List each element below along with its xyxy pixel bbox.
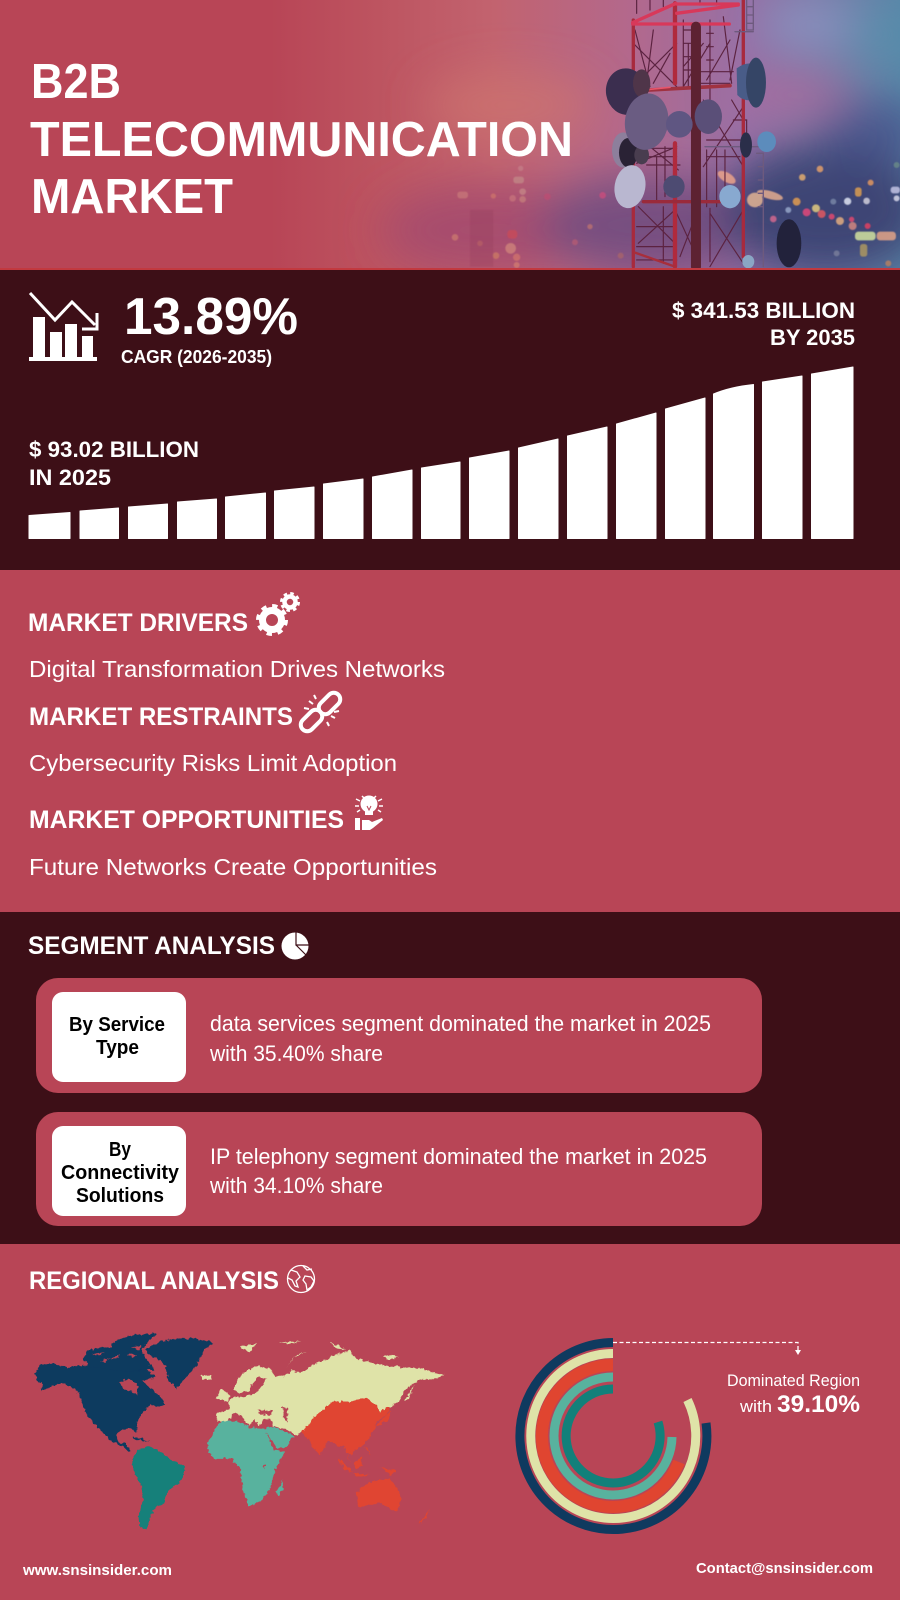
bar chart: growth 2025 to 2035: [29, 367, 853, 538]
radial bar chart: [520, 1342, 707, 1529]
label: 2035 value: $ 341.53 BILLION: [672, 298, 855, 323]
label: 2035 value: [672, 298, 855, 350]
heading: market restraints: MARKET RESTRAINTS: [29, 703, 293, 731]
arrow: dotted leader line: [613, 1342, 801, 1355]
icon: broken chain: [298, 690, 343, 734]
callout: dominated region: [727, 1372, 860, 1418]
card: connectivity solutions: Solutions: [76, 1185, 164, 1207]
callout: dominated region: 39.10%: [777, 1391, 860, 1418]
card: service type: data services segment dominated the market in 2025: [210, 1011, 711, 1036]
title: MARKET: [31, 170, 233, 224]
text: driver: Digital Transformation Drives Networks: [29, 656, 445, 682]
panel: market dynamics: [0, 570, 900, 912]
CAGR label: CAGR (2026-2035): [121, 346, 272, 367]
telecom tower: [633, 0, 763, 267]
icon: declining chart: [29, 293, 97, 361]
text: restraint: Cybersecurity Risks Limit Adoption: [29, 750, 397, 776]
icon: pie chart: [282, 932, 310, 960]
callout: dominated region: with: [739, 1397, 772, 1416]
heading: market drivers: MARKET DRIVERS: [28, 609, 248, 637]
card: connectivity solutions: IP telephony segment dominated the market in 2025: [210, 1144, 707, 1169]
heading: regional analysis: REGIONAL ANALYSIS: [29, 1267, 279, 1295]
world map: [35, 1333, 444, 1530]
bokeh city lights: [716, 162, 900, 266]
heading: market opportunities: MARKET OPPORTUNITIES: [29, 806, 344, 834]
label: 2025 value: IN 2025: [29, 465, 111, 490]
card: service type: with 35.40% share: [209, 1041, 383, 1066]
header photo: city dusk with telecom tower: [380, 0, 900, 275]
label: 2035 value: BY 2035: [770, 325, 855, 350]
card: connectivity solutions: By: [109, 1139, 132, 1161]
region: North America: [35, 1333, 213, 1451]
card: connectivity solutions: Connectivity: [61, 1162, 180, 1184]
title: B2B: [31, 55, 121, 109]
region: South America: [132, 1446, 185, 1530]
card: service type: [36, 978, 762, 1093]
header panel: [0, 0, 900, 275]
callout: dominated region: Dominated Region: [727, 1372, 860, 1390]
card: connectivity solutions: [36, 1112, 762, 1226]
card: connectivity solutions: with 34.10% share: [209, 1173, 383, 1198]
title: TELECOMMUNICATION: [30, 113, 573, 167]
text: opportunity: Future Networks Create Opportunities: [29, 854, 437, 880]
label: 2025 value: $ 93.02 BILLION: [29, 437, 199, 462]
footer: contact: Contact@snsinsider.com: [696, 1560, 873, 1577]
card: service type: Type: [96, 1037, 139, 1059]
CAGR value: 13.89%: [124, 288, 298, 346]
label: 2025 value: [29, 437, 199, 490]
region: Asia Pacific: [302, 1398, 430, 1523]
icon: gears: [258, 594, 298, 634]
icon: globe: [288, 1266, 314, 1292]
footer: website: www.snsinsider.com: [22, 1562, 172, 1579]
dishes: [602, 58, 801, 268]
card: service type: By Service: [69, 1014, 165, 1036]
region: Africa and Middle East: [207, 1421, 293, 1507]
heading: segment analysis: SEGMENT ANALYSIS: [28, 932, 275, 960]
region: Europe and Russia: [200, 1341, 444, 1436]
panel: segment analysis: [0, 912, 900, 1244]
icon: lightbulb on hand: [355, 796, 383, 830]
title: [30, 55, 573, 224]
panel: market size: [0, 270, 900, 570]
panel: regional analysis: [0, 1244, 900, 1600]
